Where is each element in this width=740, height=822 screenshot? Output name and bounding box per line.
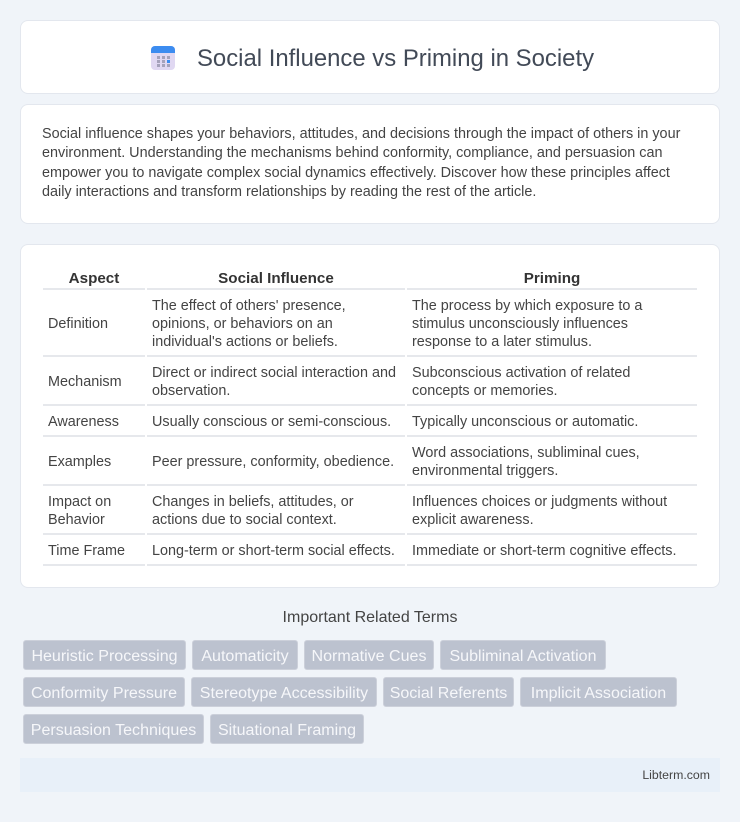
comparison table: Subconscious activation of related	[412, 365, 630, 381]
related terms tags: Heuristic Processing	[31, 647, 178, 665]
comparison table: Priming	[524, 270, 580, 287]
related terms tags: Social Referents	[390, 684, 507, 702]
comparison table: actions due to social context.	[152, 512, 337, 528]
footer credit: Libterm.com	[642, 768, 710, 782]
title: Social Influence vs Priming in Society	[197, 45, 594, 72]
comparison table: Examples	[48, 454, 111, 470]
icon: calendar	[151, 46, 175, 70]
comparison table: Influences choices or judgments without	[412, 494, 667, 510]
comparison table: Mechanism	[48, 374, 122, 390]
related terms tags: Situational Framing	[218, 721, 356, 739]
header panel	[20, 20, 720, 94]
comparison table: Immediate or short-term cognitive effects.	[412, 543, 676, 559]
comparison table: Peer pressure, conformity, obedience.	[152, 454, 394, 470]
comparison table	[43, 270, 697, 566]
intro paragraph: empower you to navigate complex social dynamics effectively. Discover how these principles affect	[42, 165, 670, 181]
comparison table: Behavior	[48, 512, 105, 528]
related terms tags	[23, 640, 677, 744]
comparison table: stimulus unconsciously influences	[412, 316, 628, 332]
related terms tags: Automaticity	[201, 647, 289, 665]
comparison table: Definition	[48, 316, 108, 332]
comparison table: concepts or memories.	[412, 383, 558, 399]
related terms tags: Subliminal Activation	[449, 647, 597, 665]
comparison table: Word associations, subliminal cues,	[412, 445, 640, 461]
intro paragraph: environment. Understanding the mechanisms behind conformity, compliance, and persuasion can	[42, 145, 662, 161]
comparison table panel	[20, 244, 720, 588]
related terms tags: Conformity Pressure	[31, 684, 177, 702]
intro paragraph	[42, 126, 680, 200]
comparison table: individual's actions or beliefs.	[152, 334, 338, 350]
related terms tags: Implicit Association	[531, 684, 666, 702]
comparison table: Time Frame	[48, 543, 125, 559]
comparison table: Usually conscious or semi-conscious.	[152, 414, 391, 430]
related terms tags: Stereotype Accessibility	[200, 684, 368, 702]
intro paragraph: daily interactions and transform relationships by reading the rest of the article.	[42, 184, 536, 200]
related terms tags: Persuasion Techniques	[31, 721, 196, 739]
comparison table: The process by which exposure to a	[412, 298, 642, 314]
comparison table: response to a later stimulus.	[412, 334, 592, 350]
comparison table: Direct or indirect social interaction and	[152, 365, 396, 381]
comparison table: opinions, or behaviors on an	[152, 316, 333, 332]
comparison table: Aspect	[69, 270, 119, 287]
comparison table: explicit awareness.	[412, 512, 534, 528]
comparison table: The effect of others' presence,	[152, 298, 346, 314]
comparison table: observation.	[152, 383, 230, 399]
comparison table: Social Influence	[218, 270, 334, 287]
footer bar	[20, 758, 720, 792]
comparison table: Long-term or short-term social effects.	[152, 543, 395, 559]
related terms heading: Important Related Terms	[283, 609, 457, 626]
comparison table: Changes in beliefs, attitudes, or	[152, 494, 354, 510]
related terms tags: Normative Cues	[312, 647, 426, 665]
comparison table: Impact on	[48, 494, 111, 510]
comparison table: Awareness	[48, 414, 119, 430]
comparison table: environmental triggers.	[412, 463, 558, 479]
intro paragraph: Social influence shapes your behaviors, attitudes, and decisions through the impact of others in your	[42, 126, 680, 142]
intro text panel	[20, 104, 720, 224]
comparison table: Typically unconscious or automatic.	[412, 414, 638, 430]
